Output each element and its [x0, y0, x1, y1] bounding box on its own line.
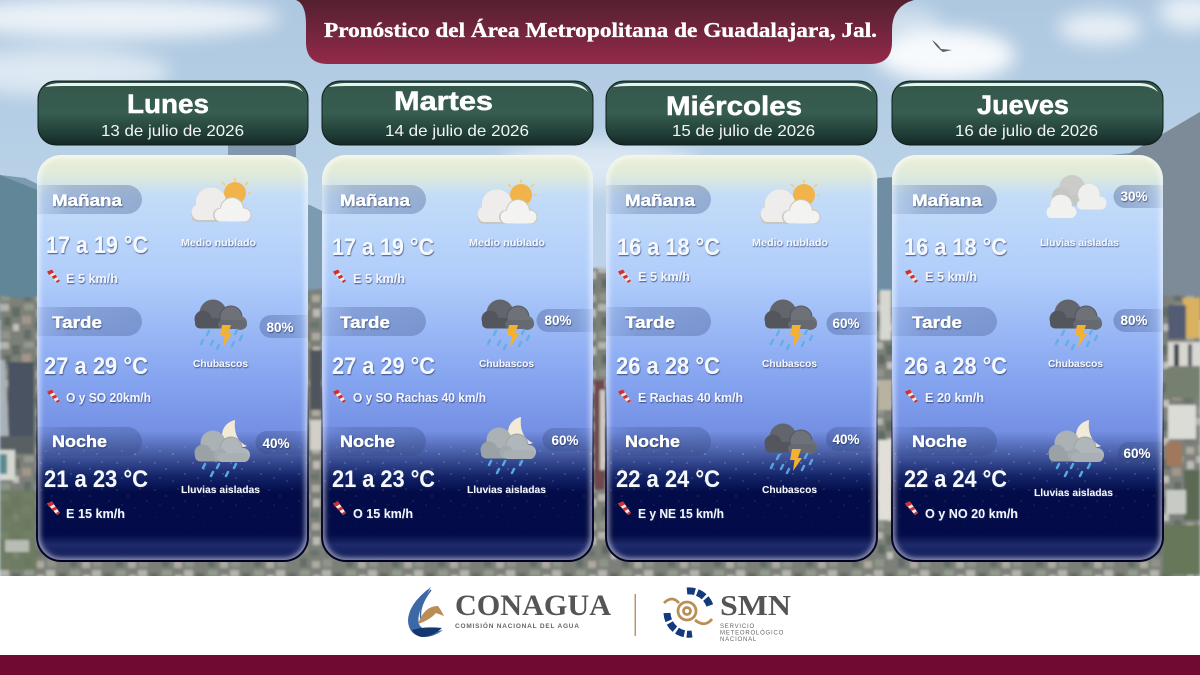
- text: Martes values: 60%: [551, 433, 579, 448]
- text: Martes values: E 5 km/h: [353, 271, 405, 286]
- text: Jueves values: E 5 km/h: [925, 269, 977, 284]
- logo: SMN: METEOROLÓGICO: [720, 630, 784, 636]
- text: Lunes values: 17 a 19 °C: [46, 232, 148, 259]
- wind socks: [618, 270, 631, 515]
- text: Lunes values: Lluvias aisladas: [181, 484, 260, 496]
- icon: bird: [932, 40, 952, 52]
- text: Miércoles values: Medio nublado: [752, 237, 828, 249]
- day header: Miércoles: [606, 81, 877, 145]
- text: Jueves values: Chubascos: [1048, 358, 1103, 370]
- title banner: [296, 0, 914, 64]
- panel: Miércoles forecast: [606, 155, 877, 561]
- text: Miércoles values: 26 a 28 °C: [616, 353, 720, 380]
- text: Martes values: Noche: [340, 432, 395, 451]
- day header: Miércoles: Miércoles: [666, 91, 802, 121]
- text: Miércoles values: Noche: [625, 432, 680, 451]
- day header: Lunes: [38, 81, 308, 145]
- icon: chubascos: [194, 300, 247, 349]
- text: Jueves values: [904, 189, 1151, 521]
- text: Jueves values: 16 a 18 °C: [904, 234, 1007, 261]
- text: Miércoles values: [616, 191, 860, 521]
- logo: SMN: [664, 590, 791, 643]
- logo: SMN: NACIONAL: [720, 637, 757, 643]
- text: Lunes values: [44, 191, 294, 521]
- icon: chubascos: [764, 300, 817, 349]
- text: Lunes values: Mañana: [52, 191, 123, 210]
- panel: Jueves forecast: [892, 155, 1163, 561]
- icon: chubascos: [1050, 300, 1102, 349]
- text: Jueves values: Lluvias aisladas: [1040, 237, 1119, 249]
- text: Martes values: 21 a 23 °C: [332, 466, 435, 493]
- text: Lunes values: 21 a 23 °C: [44, 466, 148, 493]
- day header: Jueves: 16 de julio de 2026: [955, 123, 1098, 140]
- footer band: [0, 576, 1200, 655]
- text: Martes values: Medio nublado: [469, 237, 545, 249]
- text: Jueves values: 30%: [1120, 189, 1148, 204]
- text: Lunes values: Tarde: [52, 313, 102, 332]
- icon: medio nublado: [191, 178, 252, 222]
- text: Martes values: [332, 191, 579, 521]
- text: Lunes values: 40%: [262, 436, 290, 451]
- text: Jueves values: 80%: [1120, 313, 1148, 328]
- text: Jueves values: 22 a 24 °C: [904, 466, 1007, 493]
- text: Lunes values: Medio nublado: [181, 237, 256, 249]
- wind socks: [47, 270, 60, 515]
- wind socks: [905, 270, 918, 515]
- logo: CONAGUA: COMISIÓN NACIONAL DEL AGUA: [455, 621, 579, 630]
- icon: lluvias noche: [1048, 420, 1104, 476]
- text: Jueves values: Tarde: [912, 313, 962, 332]
- text: Miércoles values: Mañana: [625, 191, 696, 210]
- day header: Martes: [322, 81, 593, 145]
- icon: lluvias noche: [194, 420, 250, 476]
- panel: Lunes forecast: [37, 155, 308, 561]
- icon: lluvias mañana: [1046, 175, 1106, 218]
- text: Martes values: 27 a 29 °C: [332, 353, 435, 380]
- text: Jueves values: E 20 km/h: [925, 390, 984, 405]
- text: Lunes values: O y SO 20km/h: [66, 390, 151, 405]
- day header: Martes: 14 de julio de 2026: [385, 123, 529, 140]
- text: Miércoles values: 16 a 18 °C: [617, 234, 720, 261]
- logo: CONAGUA: CONAGUA: [455, 589, 611, 622]
- panel: Martes forecast: [322, 155, 593, 561]
- logo: SMN: SERVICIO: [720, 624, 755, 630]
- text: Martes values: Mañana: [340, 191, 411, 210]
- text: Lunes values: E 5 km/h: [66, 271, 118, 286]
- icon: medio nublado: [477, 180, 538, 224]
- text: Jueves values: 26 a 28 °C: [904, 353, 1007, 380]
- bottom wine bar: [0, 655, 1200, 675]
- text: Miércoles values: Chubascos: [762, 358, 817, 370]
- day header: Miércoles: 15 de julio de 2026: [672, 123, 815, 140]
- text: Jueves values: Mañana: [912, 191, 983, 210]
- text: Lunes values: 27 a 29 °C: [44, 353, 148, 380]
- text: Lunes values: 80%: [266, 320, 294, 335]
- text: Lunes values: Noche: [52, 432, 107, 451]
- text: Jueves values: 60%: [1123, 446, 1151, 461]
- text: Jueves values: Lluvias aisladas: [1034, 487, 1113, 499]
- text: Miércoles values: E y NE 15 km/h: [638, 506, 724, 521]
- text: Miércoles values: E Rachas 40 km/h: [638, 390, 743, 405]
- icon: chubascos noche: [764, 424, 817, 473]
- divider: [634, 594, 636, 636]
- day header: Lunes: 13 de julio de 2026: [101, 123, 244, 140]
- icon: lluvias noche: [480, 417, 536, 473]
- logo: SMN: SMN: [720, 590, 791, 622]
- text: Martes values: O y SO Rachas 40 km/h: [353, 390, 486, 405]
- text: Martes values: 80%: [544, 313, 572, 328]
- title banner: Pronóstico del Área Metropolitana de Guadalajara, Jal.: [324, 18, 877, 42]
- text: Miércoles values: Tarde: [625, 313, 675, 332]
- text: Miércoles values: 40%: [832, 432, 860, 447]
- text: Miércoles values: 60%: [832, 316, 860, 331]
- text: Martes values: 17 a 19 °C: [332, 234, 434, 261]
- text: Lunes values: E 15 km/h: [66, 506, 125, 521]
- text: Martes values: Tarde: [340, 313, 390, 332]
- text: Martes values: Chubascos: [479, 358, 534, 370]
- day header: Jueves: Jueves: [977, 90, 1069, 120]
- text: Miércoles values: E 5 km/h: [638, 269, 690, 284]
- day header: Jueves: [892, 81, 1163, 145]
- day header: Lunes: Lunes: [127, 89, 209, 119]
- text: Lunes values: Chubascos: [193, 358, 248, 370]
- text: Martes values: O 15 km/h: [353, 506, 413, 521]
- text: Miércoles values: 22 a 24 °C: [616, 466, 720, 493]
- text: Jueves values: O y NO 20 km/h: [925, 506, 1018, 521]
- icon: medio nublado: [760, 180, 820, 224]
- logo: CONAGUA: [408, 587, 611, 637]
- text: Miércoles values: Chubascos: [762, 484, 817, 496]
- text: Martes values: Lluvias aisladas: [467, 484, 546, 496]
- day header: Martes: Martes: [394, 86, 493, 116]
- text: Jueves values: Noche: [912, 432, 967, 451]
- icon: chubascos: [482, 300, 534, 349]
- wind socks: [333, 270, 346, 515]
